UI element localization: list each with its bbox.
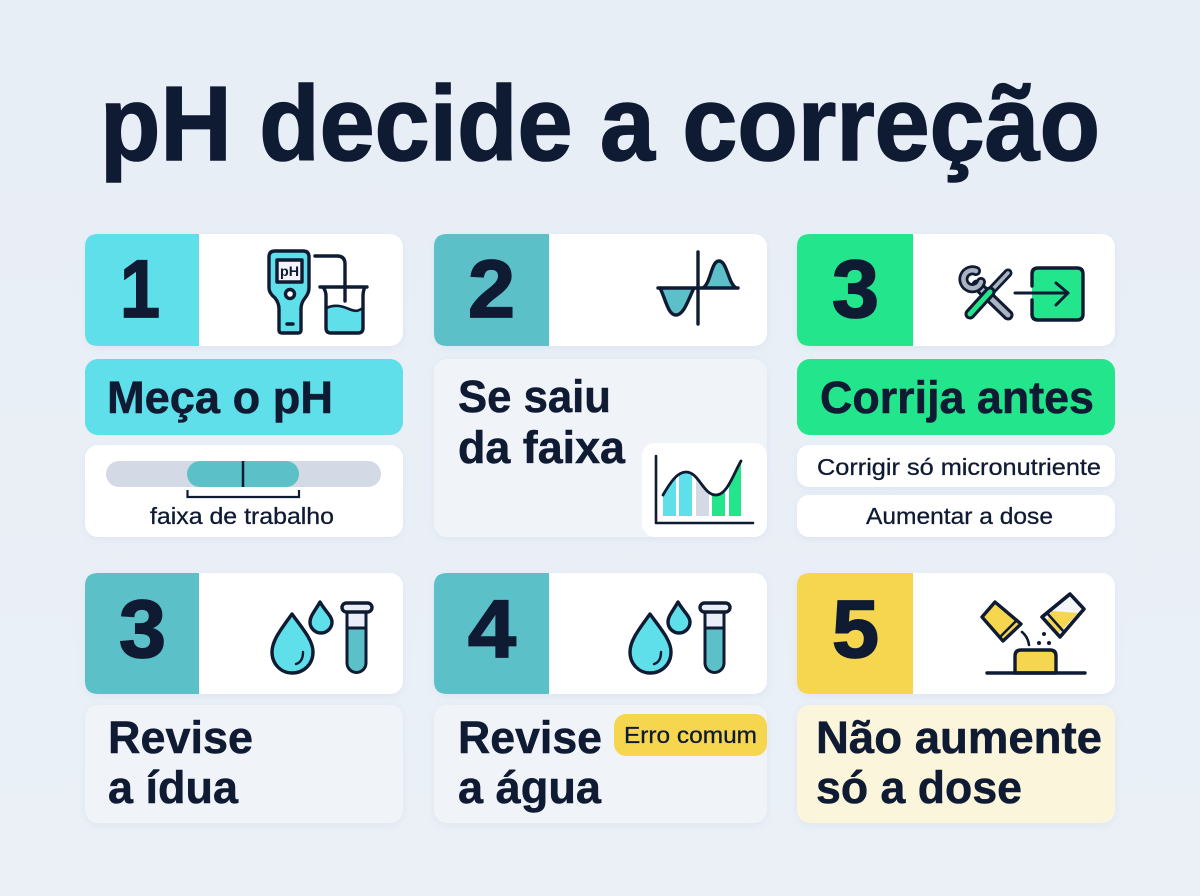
callout: Erro comum: Erro comum — [624, 722, 757, 748]
icon: shakers pouring over block — [982, 594, 1085, 673]
panel: step 2 header — [434, 234, 767, 346]
panel: Aumentar a dose — [797, 495, 1115, 537]
icon: pH meter and beaker — [269, 251, 367, 333]
panel: step 4 header — [434, 573, 767, 694]
panel: Meça o pH: Meça o pH — [107, 372, 333, 423]
panel: step 3 header — [797, 234, 1115, 346]
panel: step 5 header — [797, 573, 1115, 694]
panel: Corrigir só micronutriente: Corrigir só micronutriente — [817, 454, 1101, 480]
callout: Erro comum — [614, 714, 767, 756]
chart: mini bars with curve — [642, 443, 767, 537]
panel: Corrija antes — [797, 359, 1115, 435]
icon: pH meter and beaker: pH — [280, 263, 299, 279]
icon: drops and test tube — [272, 602, 372, 673]
panel: Revise a ídua: a ídua — [108, 762, 239, 813]
panel: Revise a ídua — [85, 705, 403, 823]
panel: working range: faixa de trabalho — [150, 503, 334, 529]
panel: step 3 header: 3 — [832, 244, 879, 335]
icon: drops and test tube — [630, 602, 730, 673]
panel: working range — [85, 445, 403, 537]
panel: Corrija antes: Corrija antes — [820, 372, 1094, 423]
panel: step 2 header: 2 — [468, 244, 515, 335]
panel: step 3 second row header — [85, 573, 403, 694]
panel: Revise a água — [434, 705, 767, 823]
panel: step 4 header: 4 — [468, 584, 516, 675]
panel: step 1 header — [85, 234, 403, 346]
panel: Se saiu da faixa — [448, 378, 767, 538]
panel: Se saiu da faixa: da faixa — [458, 422, 626, 473]
panel: Não aumente só a dose: Não aumente — [816, 712, 1102, 763]
panel: Corrigir só micronutriente — [797, 445, 1115, 487]
panel: Revise a ídua: Revise — [108, 712, 253, 763]
panel: Se saiu da faixa: Se saiu — [458, 371, 611, 422]
panel: Revise a água: a água — [458, 762, 602, 813]
panel: Não aumente só a dose: só a dose — [816, 762, 1022, 813]
title: pH decide a correção — [100, 65, 1100, 183]
panel: Revise a água: Revise — [458, 712, 602, 763]
panel: Meça o pH — [85, 359, 403, 435]
infographic — [85, 82, 1115, 823]
panel: Aumentar a dose: Aumentar a dose — [866, 503, 1053, 529]
panel: step 1 header: 1 — [120, 244, 160, 335]
panel: Não aumente só a dose — [797, 705, 1115, 823]
icon: tools and arrow into box — [963, 268, 1083, 320]
icon: curve crossing axis — [658, 252, 738, 324]
panel: step 3 second row header: 3 — [119, 584, 166, 675]
panel: step 5 header: 5 — [832, 584, 879, 675]
